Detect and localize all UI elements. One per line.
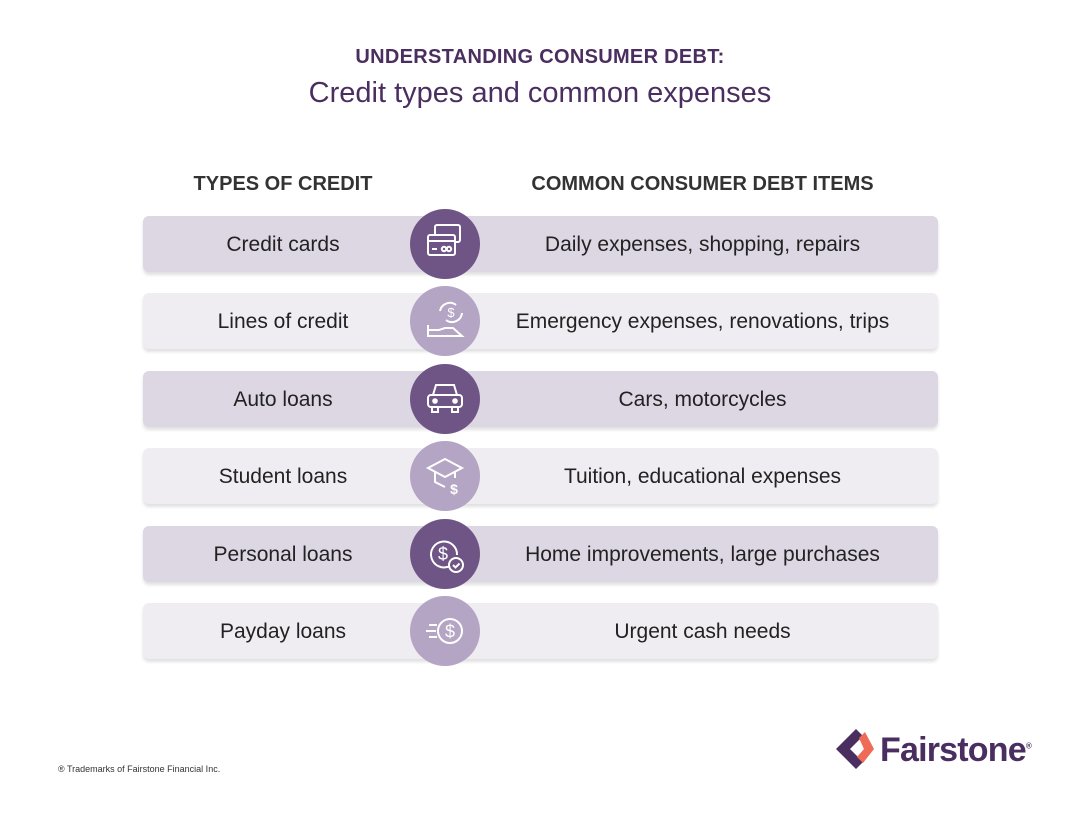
icon: dollar check [410,519,480,589]
icon: credit cards [410,209,480,279]
row 6 [143,603,938,659]
icon: line of credit [410,286,480,356]
row 1: Credit cards [226,233,340,256]
row 1: Daily expenses, shopping, repairs [545,233,860,256]
logo: Fairstone: Fairstone® [880,731,1031,769]
icon: fast dollar: $ [445,622,455,642]
row 5 [143,526,938,582]
row 2: Lines of credit [218,310,348,333]
row 5: Home improvements, large purchases [525,543,880,566]
heading: types of credit: TYPES OF CREDIT [194,173,372,195]
icon: graduation cap [410,441,480,511]
row 4: Student loans [219,465,347,488]
icon: line of credit: $ [447,305,455,320]
row 5: Personal loans [214,543,352,566]
heading: common consumer debt items: COMMON CONSUMER DEBT ITEMS [531,173,874,195]
row 3: Auto loans [233,388,333,411]
row 6: Payday loans [220,620,346,643]
icon: car [410,364,480,434]
icon: graduation cap: $ [450,481,458,497]
row 3: Cars, motorcycles [618,388,787,411]
row 2 [143,293,938,349]
row 4: Tuition, educational expenses [564,465,841,488]
footnote: ® Trademarks of Fairstone Financial Inc. [58,764,220,774]
icon: dollar check: $ [438,544,448,564]
row 6: Urgent cash needs [614,620,791,643]
icon: fast dollar [410,596,480,666]
row 2: Emergency expenses, renovations, trips [516,310,889,333]
row 4 [143,448,938,504]
title: UNDERSTANDING CONSUMER DEBT: [355,46,725,68]
subtitle: Credit types and common expenses [309,77,771,109]
row 3 [143,371,938,427]
row 1 [143,216,938,272]
